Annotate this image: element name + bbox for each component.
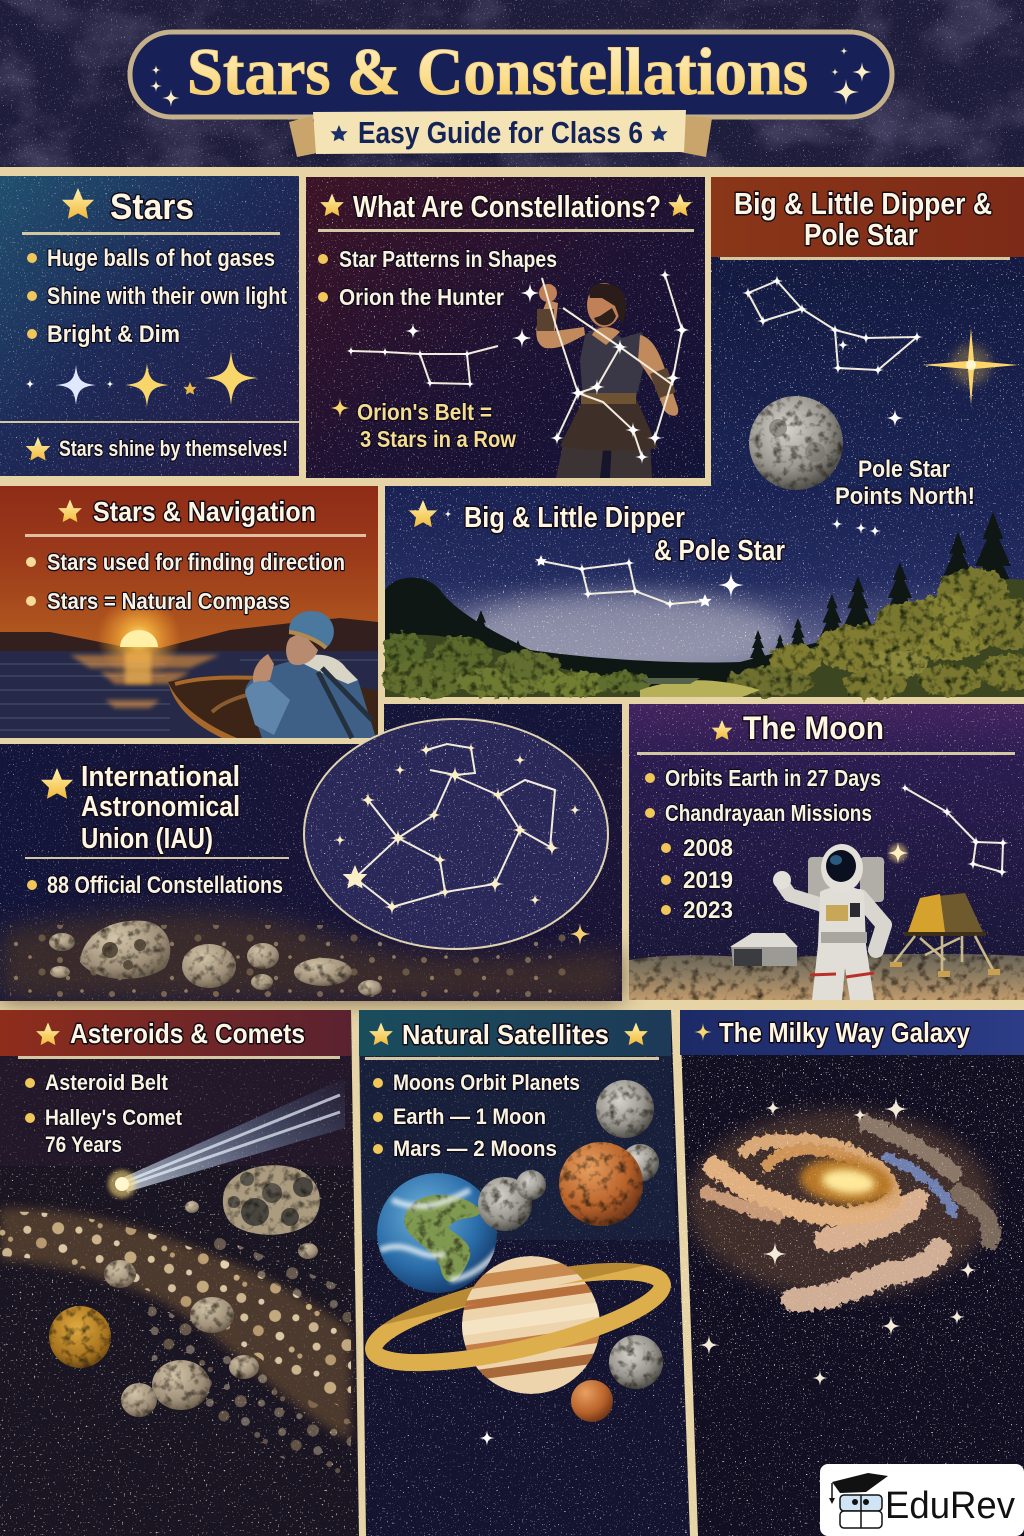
- heading: iau: Union (IAU): [81, 823, 213, 855]
- callout: orion's belt: [330, 398, 516, 452]
- subtitle ribbon: Easy Guide for Class 6: [358, 115, 643, 150]
- bullet list: constellations: Star Patterns in Shapes: [339, 246, 557, 272]
- heading: iau: Astronomical: [81, 791, 240, 823]
- constellation: moon panel: [887, 783, 1009, 878]
- panel: natural satellites: [359, 1010, 690, 1536]
- planet: moons: [478, 1080, 663, 1389]
- heading: dipper: Pole Star: [804, 217, 918, 252]
- panel: forest sky: [381, 486, 1024, 699]
- panel: milky way galaxy: [680, 1010, 1024, 1536]
- callout: pole star points north: Points North!: [835, 483, 975, 510]
- large asteroid: [223, 1165, 320, 1235]
- heading: milky way: The Milky Way Galaxy: [719, 1017, 970, 1048]
- icon: comet: [108, 1078, 345, 1198]
- panel: international astronomical union: [0, 704, 622, 1001]
- heading: asteroids: Asteroids & Comets: [70, 1018, 305, 1049]
- subtitle ribbon: [289, 110, 712, 157]
- illustration: spiral galaxy: [682, 1056, 1024, 1376]
- callout: orion's belt: 3 Stars in a Row: [360, 426, 516, 452]
- title sparkles: [150, 47, 872, 107]
- heading: navigation: Stars & Navigation: [93, 496, 316, 527]
- bullet list: asteroids: Halley's Comet: [45, 1105, 183, 1130]
- callout: pole star points north: [835, 456, 975, 510]
- planet: earth: [377, 1173, 498, 1293]
- bullet list: navigation: Stars = Natural Compass: [47, 588, 290, 614]
- heading: stars: [62, 186, 194, 227]
- bullet list: asteroids: 76 Years: [45, 1132, 122, 1157]
- title text: Stars & Constellations: [187, 35, 808, 109]
- planet: ringed gas giant: [367, 1253, 669, 1394]
- chandrayaan lander: [890, 893, 1000, 977]
- panel: asteroids and comets: [0, 1010, 359, 1536]
- logo: edurev: EduRev: [885, 1485, 1015, 1527]
- heading: forest dipper: Big & Little Dipper: [464, 502, 685, 534]
- small asteroids and planet: [49, 1201, 318, 1417]
- heading: moon: The Moon: [743, 710, 884, 746]
- bullet: 88 constellations: 88 Official Constellations: [47, 872, 283, 899]
- bullet list: moon: 2019: [683, 867, 733, 894]
- heading: stars: Stars: [110, 186, 194, 227]
- bullet list: moon: 2023: [683, 897, 733, 924]
- bullet list: asteroids: [25, 1070, 183, 1157]
- planet: small orange: [571, 1380, 613, 1422]
- callout: pole star points north: Pole Star: [858, 456, 950, 483]
- asteroids row: [49, 921, 382, 996]
- icon: pole star: [922, 328, 1018, 405]
- sparkles around galaxy: [699, 1097, 977, 1386]
- bullet list: navigation: Stars used for finding direction: [47, 549, 345, 575]
- bullet list: moon: Orbits Earth in 27 Days: [665, 765, 881, 791]
- bullet list: constellations: Orion the Hunter: [339, 284, 504, 310]
- sun and reflection: [70, 596, 220, 708]
- bullet list: constellations: [318, 246, 557, 310]
- bullet list: stars: Huge balls of hot gases: [47, 245, 275, 272]
- bullet list: satellites: Moons Orbit Planets: [393, 1070, 580, 1095]
- constellation: forest dipper: [535, 518, 881, 610]
- heading: iau: [41, 761, 240, 855]
- bullet list: satellites: Mars — 2 Moons: [393, 1136, 557, 1161]
- panel: the moon: [629, 704, 1024, 1000]
- bullet list: navigation: [26, 549, 345, 614]
- hills on horizon: [0, 618, 378, 652]
- bullet list: stars: [27, 245, 287, 348]
- heading: constellations: What Are Constellations?: [353, 189, 661, 224]
- heading: forest dipper: & Pole Star: [654, 535, 785, 567]
- title banner: [130, 32, 892, 117]
- panel: what are constellations: [306, 177, 705, 478]
- bullet list: moon: Chandrayaan Missions: [665, 800, 872, 826]
- callout: orion's belt: Orion's Belt =: [357, 399, 492, 425]
- illustration: orion the hunter: [520, 269, 690, 478]
- constellation: big dipper: [742, 275, 923, 427]
- bullet list: asteroids: Asteroid Belt: [45, 1070, 169, 1095]
- planet: mars: [559, 1142, 643, 1226]
- star map: [304, 719, 608, 949]
- bullet list: satellites: Earth — 1 Moon: [393, 1104, 546, 1129]
- logo: edurev: [820, 1464, 1024, 1536]
- lunar ground: [629, 954, 1024, 1000]
- bullet list: satellites: [373, 1070, 580, 1161]
- panel: stars and navigation: [0, 486, 378, 738]
- asteroid belt: [0, 1208, 351, 1480]
- panel: stars: [0, 176, 299, 476]
- callout: stars shine: Stars shine by themselves!: [59, 436, 288, 461]
- lunar base: [730, 933, 798, 966]
- heading: iau: International: [81, 761, 240, 793]
- icon: bright and dim stars: [25, 351, 258, 407]
- bullet list: moon: 2008: [683, 835, 733, 862]
- astronaut: [773, 844, 884, 1000]
- icon: moon: [749, 396, 843, 490]
- icon: graduation cap mascot: [829, 1473, 888, 1528]
- heading: dipper: [734, 186, 992, 252]
- illustration: sailor in boat: [168, 611, 378, 738]
- heading: forest dipper: [409, 500, 785, 567]
- planets: [367, 1080, 669, 1446]
- bullet list: moon: [645, 765, 881, 924]
- bullet list: stars: Bright & Dim: [47, 321, 180, 348]
- bullet list: stars: Shine with their own light: [47, 283, 287, 310]
- panel: big and little dipper: [711, 177, 1024, 490]
- heading: satellites: Natural Satellites: [402, 1019, 609, 1050]
- forest: [381, 512, 1024, 699]
- constellation: dipper small: [346, 323, 532, 389]
